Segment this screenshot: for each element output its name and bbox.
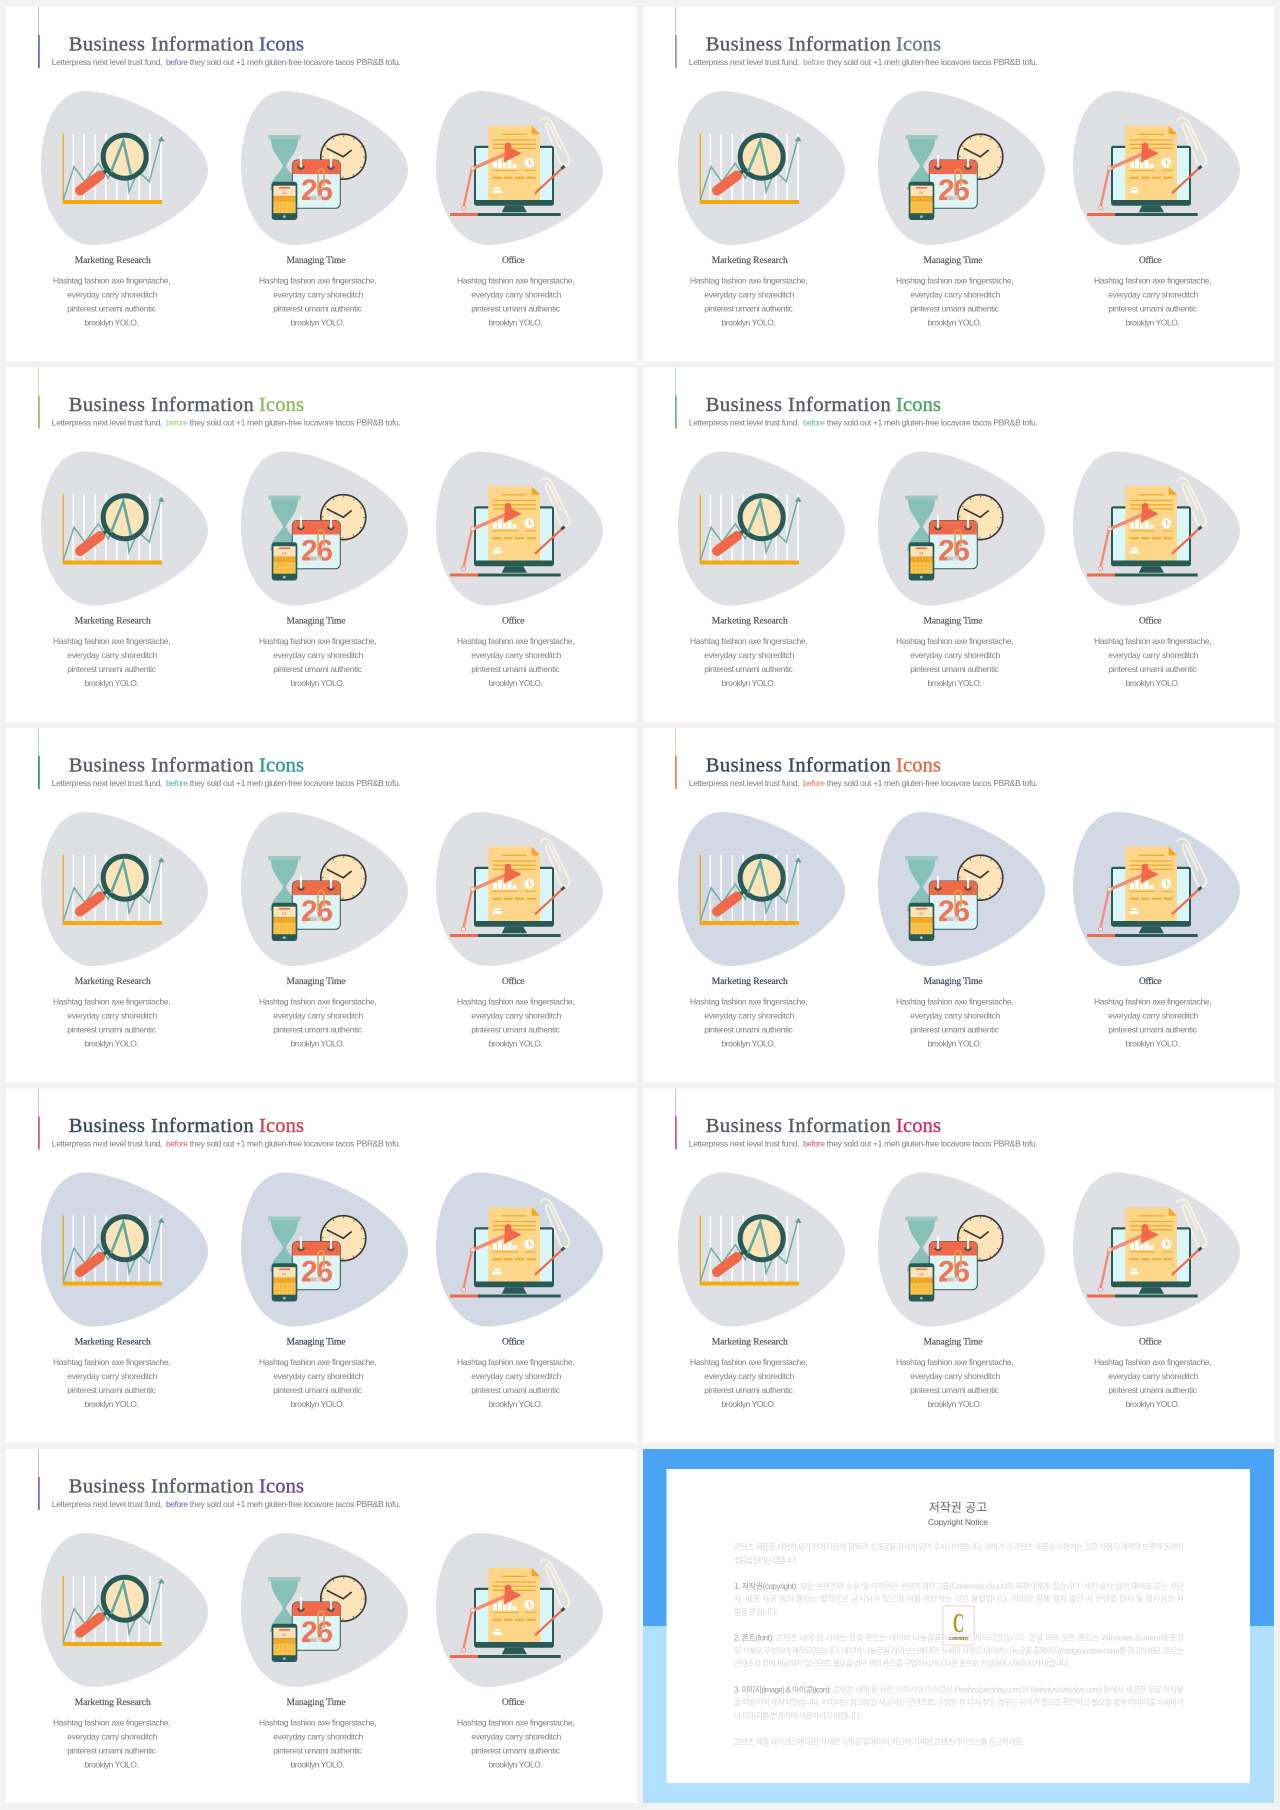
subtitle: before: [803, 778, 825, 788]
column: Office: pinterest umami authentic: [471, 1746, 561, 1756]
column: Marketing Research: everyday carry shoreditch: [67, 1371, 158, 1381]
subtitle: before: [166, 1138, 188, 1148]
column: Managing Time: 24: [919, 190, 924, 195]
column: Office: pinterest umami authentic: [471, 1024, 561, 1034]
column: Marketing Research: [41, 1533, 208, 1770]
column: Managing Time: [241, 1533, 408, 1770]
column: Marketing Research: [678, 91, 845, 328]
heading: Icons: [259, 1115, 304, 1137]
subtitle: they sold out +1 meh gluten-free locavore tacos PBR&B tofu.: [827, 57, 1038, 67]
column: Marketing Research: Hashtag fashion axe fingerstache,: [53, 996, 171, 1006]
column: Marketing Research: everyday carry shoreditch: [704, 1010, 795, 1020]
column: Office: Office: [502, 1697, 524, 1708]
notice: font clause: 콘텐츠 내에 된 서체는 한글 폰트는 네이버 나눔글꼴의 서체로 제작되었습니다. 한글 외의 모든 폰트는 Windows System에 포함: [776, 1632, 1185, 1642]
column: Marketing Research: Marketing Research: [75, 256, 151, 266]
accent bar: [675, 7, 677, 68]
column: Managing Time: Hashtag fashion axe fingerstache,: [259, 275, 377, 285]
subtitle: before: [166, 1499, 188, 1509]
column: Marketing Research: brooklyn YOLO.: [84, 678, 139, 688]
column: Managing Time: Managing Time: [924, 1338, 982, 1348]
column: Managing Time: pinterest umami authentic: [273, 664, 363, 674]
column: Office: [436, 91, 603, 328]
panel: indigo slide: [6, 7, 637, 361]
column: Office: everyday carry shoreditch: [1108, 1010, 1199, 1020]
panel: copyright notice: [643, 1449, 1274, 1803]
column: Managing Time: 26: [301, 895, 333, 928]
column: Marketing Research: Hashtag fashion axe fingerstache,: [53, 1357, 171, 1367]
column: Office: everyday carry shoreditch: [1108, 289, 1199, 299]
logo badge: C: [953, 1607, 964, 1638]
subtitle: they sold out +1 meh gluten-free locavore tacos PBR&B tofu.: [190, 418, 401, 428]
column: Managing Time: 26: [301, 1256, 333, 1288]
column: Managing Time: 24: [919, 550, 924, 556]
subtitle: Letterpress next level trust fund,: [52, 1499, 162, 1509]
notice intro: 콘텐츠 제품을 사용하시기 전에 다음의 항목과 소개글을 자세히 읽어 주시기 바랍니다. 귀하가 이 콘텐츠 제품을 사용하는 것은 사용자 계약과 보증에 동의하: [734, 1542, 1185, 1552]
column: Managing Time: [241, 452, 408, 688]
column: Office: brooklyn YOLO.: [1126, 1399, 1180, 1409]
heading: Icons: [896, 394, 941, 416]
heading: Business Information: [69, 394, 254, 416]
notice: image clause: [734, 1684, 1184, 1720]
column: Office: [436, 1172, 603, 1409]
column: Marketing Research: Marketing Research: [75, 977, 151, 987]
column: Managing Time: brooklyn YOLO.: [928, 1039, 982, 1049]
column: Managing Time: [878, 1172, 1045, 1409]
subtitle: before: [166, 418, 188, 428]
accent bar: [38, 1088, 40, 1150]
subtitle: they sold out +1 meh gluten-free locavore tacos PBR&B tofu.: [190, 1138, 401, 1148]
column: Managing Time: [878, 812, 1045, 1049]
notice footer: 콘텐츠 제품 라이선스에 대한 자세한 사항은 홈페이지 하단에 기재된 콘텐츠라이선스를 참고하세요.: [734, 1736, 1024, 1746]
heading: Business Information: [706, 34, 891, 56]
column: Marketing Research: Hashtag fashion axe fingerstache,: [690, 275, 808, 285]
subtitle: [689, 57, 1038, 67]
column: Office: everyday carry shoreditch: [471, 1731, 562, 1741]
column: Managing Time: 24: [282, 911, 287, 916]
column: Managing Time: pinterest umami authentic: [273, 1024, 363, 1034]
column: Office: pinterest umami authentic: [471, 664, 561, 674]
column: Managing Time: brooklyn YOLO.: [290, 1039, 345, 1049]
column: Managing Time: pinterest umami authentic: [910, 664, 1000, 674]
column: Marketing Research: pinterest umami authentic: [67, 1746, 157, 1756]
heading: Business Information: [69, 34, 254, 56]
column: Office: Office: [1139, 616, 1162, 626]
column: Managing Time: 24: [282, 1272, 287, 1276]
column: Office: brooklyn YOLO.: [488, 318, 543, 328]
subtitle: they sold out +1 meh gluten-free locavore tacos PBR&B tofu.: [827, 1138, 1038, 1148]
column: Managing Time: 26: [938, 174, 970, 207]
column: Managing Time: 24: [282, 550, 287, 556]
column: Managing Time: Managing Time: [286, 977, 346, 987]
column: Managing Time: pinterest umami authentic: [910, 304, 1000, 314]
column: Managing Time: [241, 812, 408, 1049]
notice: image clause: 콘텐츠 내에 된 사진, 이미지와 아이콘은 Pixabay(pixabay.com)와 Webalys(webalys.com) 등에서 제공한 무료 저작물: [833, 1684, 1184, 1694]
column: Managing Time: 26: [938, 895, 970, 928]
column: Marketing Research: everyday carry shoreditch: [704, 650, 795, 660]
column: Managing Time: everyday carry shoreditch: [910, 1371, 1001, 1381]
column: Office: everyday carry shoreditch: [471, 1010, 562, 1020]
column: Managing Time: brooklyn YOLO.: [928, 318, 982, 328]
column: Marketing Research: pinterest umami authentic: [704, 1024, 794, 1034]
column: Managing Time: everyday carry shoreditch: [273, 1010, 364, 1020]
column: Office: pinterest umami authentic: [1108, 1385, 1198, 1395]
subtitle: Letterpress next level trust fund,: [52, 57, 162, 67]
column: Managing Time: Managing Time: [924, 977, 982, 987]
notice: copyright clause: 벌을 받습니다.: [734, 1606, 778, 1616]
column: Managing Time: pinterest umami authentic: [273, 1746, 363, 1756]
logo badge: CONTENT: [948, 1636, 969, 1641]
column: Office: Hashtag fashion axe fingerstache,: [457, 1717, 575, 1727]
heading: Business Information: [706, 394, 891, 416]
column: Marketing Research: Hashtag fashion axe fingerstache,: [690, 996, 808, 1006]
column: Office: brooklyn YOLO.: [1126, 318, 1180, 328]
column: Marketing Research: brooklyn YOLO.: [722, 1039, 776, 1049]
panel: slate slide: [643, 7, 1274, 361]
column: Office: Hashtag fashion axe fingerstache,: [1094, 636, 1212, 646]
heading: Icons: [259, 754, 304, 776]
column: Marketing Research: brooklyn YOLO.: [722, 1399, 776, 1409]
column: Office: pinterest umami authentic: [1108, 664, 1198, 674]
column: Marketing Research: pinterest umami authentic: [67, 1024, 157, 1034]
column: Marketing Research: [41, 1172, 208, 1409]
column: Marketing Research: [678, 812, 845, 1049]
subtitle: before: [803, 418, 825, 428]
column: Managing Time: [241, 91, 408, 328]
column: Marketing Research: Marketing Research: [75, 1338, 151, 1348]
column: Marketing Research: brooklyn YOLO.: [84, 1039, 139, 1049]
panel: red slide: [6, 1088, 637, 1442]
subtitle: Letterpress next level trust fund,: [52, 418, 162, 428]
column: Managing Time: Hashtag fashion axe fingerstache,: [896, 275, 1014, 285]
panel: pink slide: [643, 1088, 1274, 1442]
notice: image clause: 나 이미지를 변경하여 사용하시기 바랍니다.: [734, 1710, 862, 1720]
subtitle: [689, 418, 1038, 428]
subtitle: Letterpress next level trust fund,: [52, 1138, 162, 1148]
heading: Business Information: [706, 754, 891, 776]
accent bar: [675, 368, 677, 428]
subtitle: they sold out +1 meh gluten-free locavore tacos PBR&B tofu.: [190, 1499, 401, 1509]
column: Marketing Research: everyday carry shoreditch: [67, 1731, 158, 1741]
column: Managing Time: Hashtag fashion axe fingerstache,: [896, 1357, 1014, 1367]
subtitle: [689, 778, 1038, 788]
heading: Business Information: [69, 754, 254, 776]
column: Office: everyday carry shoreditch: [1108, 1371, 1199, 1381]
column: Office: Hashtag fashion axe fingerstache,: [1094, 1357, 1212, 1367]
subtitle: they sold out +1 meh gluten-free locavore tacos PBR&B tofu.: [190, 778, 401, 788]
panel: purple slide: [6, 1449, 637, 1803]
column: Marketing Research: [41, 452, 208, 688]
subtitle: they sold out +1 meh gluten-free locavore tacos PBR&B tofu.: [190, 57, 401, 67]
subtitle: Letterpress next level trust fund,: [689, 778, 799, 788]
accent bar: [675, 1088, 677, 1150]
column: Office: brooklyn YOLO.: [488, 678, 543, 688]
column: Marketing Research: Hashtag fashion axe fingerstache,: [53, 1717, 171, 1727]
notice: font clause: 콘텐츠와 함께 제공되지 않으므로, 필요할 경우 위의 폰트를 구입하시거나 다른 폰트로 변경하여 사용하시기 바랍니다.: [734, 1658, 1070, 1668]
column: Marketing Research: everyday carry shoreditch: [67, 1010, 158, 1020]
column: Office: [1073, 452, 1240, 688]
column: Managing Time: Managing Time: [286, 256, 346, 266]
subtitle: before: [166, 57, 188, 67]
subtitle: Letterpress next level trust fund,: [52, 778, 162, 788]
column: Managing Time: Managing Time: [286, 1338, 346, 1348]
heading: Business Information: [69, 1115, 254, 1137]
column: Managing Time: everyday carry shoreditch: [273, 1371, 364, 1381]
column: Marketing Research: [41, 812, 208, 1049]
panel: green slide: [643, 368, 1274, 722]
column: Marketing Research: everyday carry shoreditch: [704, 289, 795, 299]
subtitle: before: [803, 57, 825, 67]
column: Office: Office: [502, 976, 524, 987]
notice: font clause: 2. 폰트(font):: [734, 1634, 774, 1642]
subtitle: [52, 1499, 401, 1509]
subtitle: they sold out +1 meh gluten-free locavore tacos PBR&B tofu.: [827, 418, 1038, 428]
column: Office: everyday carry shoreditch: [471, 650, 562, 660]
column: Managing Time: pinterest umami authentic: [273, 1385, 363, 1395]
column: Marketing Research: [678, 452, 845, 688]
column: Managing Time: 26: [938, 534, 970, 568]
column: Office: brooklyn YOLO.: [488, 1399, 543, 1409]
column: Marketing Research: Marketing Research: [75, 1698, 151, 1708]
column: Managing Time: brooklyn YOLO.: [290, 678, 345, 688]
panel: teal slide: [6, 728, 637, 1082]
column: Office: [1073, 1172, 1240, 1409]
heading: Icons: [896, 1115, 941, 1137]
column: Managing Time: Managing Time: [924, 256, 982, 266]
heading: Business Information: [706, 1115, 891, 1137]
accent bar: [38, 368, 40, 428]
column: Marketing Research: Hashtag fashion axe fingerstache,: [690, 636, 808, 646]
subtitle: [52, 418, 401, 428]
column: Office: Hashtag fashion axe fingerstache,: [457, 275, 575, 285]
heading: Icons: [896, 34, 941, 56]
subtitle: [52, 1138, 401, 1148]
notice: copyright clause: 사, 배포 사용 등의 행위는 법적으로 금지되어 있으며 이를 위반하는 것은 불법입니다. 이러한 침해 행위 발견 시 관련법 민사 및 형사상의 처: [734, 1594, 1184, 1604]
column: Office: [436, 812, 603, 1049]
heading: copyright title: 저작권 공고: [929, 1500, 987, 1514]
column: Managing Time: everyday carry shoreditch: [273, 1731, 364, 1741]
column: Marketing Research: [678, 1172, 845, 1409]
subtitle: they sold out +1 meh gluten-free locavore tacos PBR&B tofu.: [827, 778, 1038, 788]
column: Office: Office: [1139, 976, 1162, 987]
heading: Business Information: [69, 1476, 254, 1498]
column: Managing Time: 26: [938, 1256, 970, 1288]
column: Managing Time: everyday carry shoreditch: [273, 289, 364, 299]
column: Office: Hashtag fashion axe fingerstache,: [457, 996, 575, 1006]
logo badge: [943, 1606, 974, 1645]
column: Marketing Research: brooklyn YOLO.: [722, 678, 776, 688]
column: Managing Time: 26: [301, 1616, 333, 1649]
column: Marketing Research: Hashtag fashion axe fingerstache,: [53, 636, 171, 646]
panel: orange slide: [643, 728, 1274, 1082]
column: Managing Time: pinterest umami authentic: [910, 1385, 1000, 1395]
column: Managing Time: brooklyn YOLO.: [290, 1760, 345, 1770]
accent bar: [38, 1449, 40, 1510]
heading: Icons: [259, 394, 304, 416]
notice intro: 셨음을 알리는 것입니다.: [734, 1555, 797, 1565]
column: Office: brooklyn YOLO.: [488, 1039, 543, 1049]
column: Managing Time: Hashtag fashion axe fingerstache,: [259, 1717, 377, 1727]
column: Office: everyday carry shoreditch: [1108, 650, 1199, 660]
column: Marketing Research: Marketing Research: [75, 616, 151, 626]
column: Marketing Research: Hashtag fashion axe fingerstache,: [690, 1357, 808, 1367]
column: Managing Time: Hashtag fashion axe fingerstache,: [896, 996, 1014, 1006]
column: Marketing Research: brooklyn YOLO.: [84, 1399, 139, 1409]
notice intro: [734, 1542, 1185, 1565]
column: Managing Time: 24: [282, 1632, 287, 1637]
notice: image clause: 3. 이미지(image) & 아이콘(icon):: [734, 1684, 831, 1694]
column: Managing Time: brooklyn YOLO.: [290, 1399, 345, 1409]
column: Office: everyday carry shoreditch: [471, 1371, 562, 1381]
column: Marketing Research: Marketing Research: [712, 1338, 788, 1348]
notice: copyright clause: 1. 저작권(copyright):: [734, 1581, 798, 1591]
column: Managing Time: brooklyn YOLO.: [290, 318, 345, 328]
subtitle: before: [803, 1138, 825, 1148]
column: Office: Office: [1139, 1336, 1162, 1348]
column: Office: Hashtag fashion axe fingerstache,: [457, 636, 575, 646]
column: Office: Office: [1139, 255, 1162, 266]
column: Managing Time: Hashtag fashion axe fingerstache,: [259, 1357, 377, 1367]
column: Managing Time: everyday carry shoreditch: [910, 650, 1001, 660]
column: Office: brooklyn YOLO.: [488, 1760, 543, 1770]
column: Managing Time: pinterest umami authentic: [910, 1024, 1000, 1034]
column: Marketing Research: pinterest umami authentic: [67, 664, 157, 674]
subtitle: Letterpress next level trust fund,: [689, 1138, 799, 1148]
column: Marketing Research: pinterest umami authentic: [704, 1385, 794, 1395]
column: Managing Time: everyday carry shoreditch: [910, 289, 1001, 299]
column: Marketing Research: brooklyn YOLO.: [84, 1760, 139, 1770]
column: Office: brooklyn YOLO.: [1126, 678, 1180, 688]
column: Office: Office: [502, 1336, 524, 1348]
subtitle: Letterpress next level trust fund,: [689, 418, 799, 428]
column: Managing Time: 26: [301, 534, 333, 568]
column: Managing Time: [878, 452, 1045, 688]
notice: image clause: 을 이용하여 제작되었습니다. 이미지는 참고용일 제공되는 콘텐츠로, 구입한 후 다시 찾은 경우는 귀하가 별도로 확인하고 필요할 경우 이미지를 삭제하거: [734, 1697, 1184, 1707]
column: Managing Time: 24: [282, 190, 287, 195]
column: Managing Time: Managing Time: [286, 616, 346, 626]
subtitle: [52, 778, 401, 788]
column: Marketing Research: pinterest umami authentic: [704, 664, 794, 674]
column: Office: pinterest umami authentic: [471, 1385, 561, 1395]
column: Marketing Research: Marketing Research: [712, 616, 788, 626]
notice: font clause: [734, 1632, 1185, 1668]
column: Office: brooklyn YOLO.: [1126, 1039, 1180, 1049]
column: Office: [1073, 91, 1240, 328]
column: Office: [1073, 812, 1240, 1049]
column: Office: pinterest umami authentic: [1108, 304, 1198, 314]
column: Marketing Research: brooklyn YOLO.: [722, 318, 776, 328]
column: Managing Time: Managing Time: [924, 616, 982, 626]
column: Marketing Research: Marketing Research: [712, 977, 788, 987]
subtitle: before: [166, 778, 188, 788]
subheading: Copyright Notice: [928, 1517, 988, 1527]
column: Managing Time: everyday carry shoreditch: [910, 1010, 1001, 1020]
column: Office: Office: [502, 616, 524, 626]
column: Marketing Research: Marketing Research: [712, 256, 788, 266]
column: Office: everyday carry shoreditch: [471, 289, 562, 299]
column: Marketing Research: Hashtag fashion axe fingerstache,: [53, 275, 171, 285]
panel: lime slide: [6, 368, 637, 722]
column: Managing Time: pinterest umami authentic: [273, 304, 363, 314]
column: Marketing Research: everyday carry shoreditch: [67, 650, 158, 660]
column: Managing Time: brooklyn YOLO.: [928, 678, 982, 688]
notice: copyright clause: [734, 1581, 1185, 1616]
column: Managing Time: Managing Time: [286, 1698, 346, 1708]
column: Office: pinterest umami authentic: [471, 304, 561, 314]
column: Office: Hashtag fashion axe fingerstache,: [1094, 996, 1212, 1006]
subtitle: Letterpress next level trust fund,: [689, 57, 799, 67]
accent bar: [675, 728, 677, 789]
column: Managing Time: brooklyn YOLO.: [928, 1399, 982, 1409]
column: Marketing Research: [41, 91, 208, 328]
column: Managing Time: 26: [301, 174, 333, 207]
column: Office: Office: [502, 255, 524, 266]
accent bar: [38, 728, 40, 789]
heading: Icons: [896, 754, 941, 776]
notice: font clause: 된 서체로 구성되어 제작되었습니다. 네이버 나눔글꼴 라이선스에 대한 자세한 사항은 네이버 나눔글꼴 홈페이지(hangeul.naver.com)를 참고하세요. 폰트는: [734, 1646, 1184, 1656]
column: Office: Hashtag fashion axe fingerstache,: [1094, 275, 1212, 285]
subtitle: [52, 57, 401, 67]
column: Managing Time: Hashtag fashion axe fingerstache,: [896, 636, 1014, 646]
column: Managing Time: Hashtag fashion axe fingerstache,: [259, 996, 377, 1006]
column: Managing Time: 24: [919, 911, 924, 916]
column: Marketing Research: pinterest umami authentic: [67, 1385, 157, 1395]
column: Marketing Research: pinterest umami authentic: [67, 304, 157, 314]
subtitle: [689, 1138, 1038, 1148]
column: Office: pinterest umami authentic: [1108, 1024, 1198, 1034]
notice: copyright clause: 모든 콘텐츠의 소유 및 저작권은 콘텐츠제작그룹(Contentstockout)의 제작사에게 있습니다. 사전 승낙 없이 재배포 또는 무단: [800, 1581, 1185, 1591]
column: Office: [436, 452, 603, 688]
heading: Icons: [259, 34, 304, 56]
heading: Icons: [259, 1476, 304, 1498]
column: Marketing Research: everyday carry shoreditch: [704, 1371, 795, 1381]
column: Office: Hashtag fashion axe fingerstache,: [457, 1357, 575, 1367]
column: Marketing Research: pinterest umami authentic: [704, 304, 794, 314]
column: Managing Time: Hashtag fashion axe fingerstache,: [259, 636, 377, 646]
column: Marketing Research: brooklyn YOLO.: [84, 318, 139, 328]
accent bar: [38, 7, 40, 68]
column: Managing Time: 24: [919, 1272, 924, 1276]
column: Office: [436, 1533, 603, 1770]
column: Managing Time: [241, 1172, 408, 1409]
column: Managing Time: everyday carry shoreditch: [273, 650, 364, 660]
column: Managing Time: [878, 91, 1045, 328]
column: Marketing Research: everyday carry shoreditch: [67, 289, 158, 299]
